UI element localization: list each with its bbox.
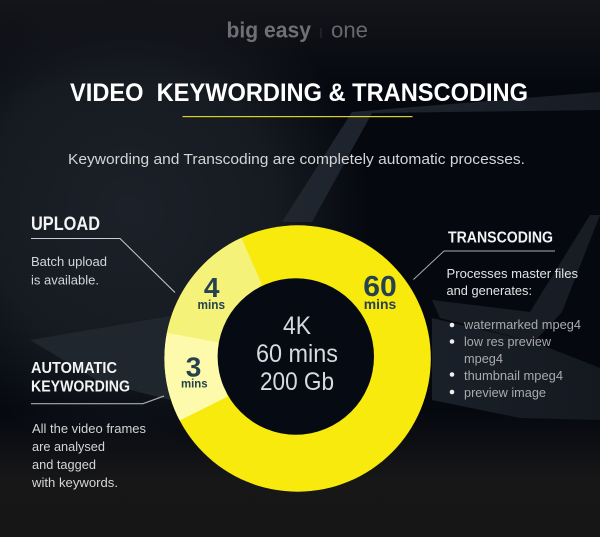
segment: automatic keywording 3 mins (164, 332, 228, 420)
panel: transcoding (414, 230, 581, 400)
upload description: Batch upload (31, 254, 107, 269)
donut chart (164, 225, 431, 492)
leader line: upload (31, 238, 175, 292)
value: 60 mins: mins (364, 296, 396, 312)
value: 4 mins: mins (198, 298, 225, 312)
keywording description (31, 421, 146, 490)
segment: transcoding 60 mins (164, 225, 431, 492)
segment: upload 4 mins (166, 238, 262, 342)
title underline (182, 116, 412, 117)
heading: automatic keywording: KEYWORDING (31, 378, 130, 396)
centre text: 4K (283, 312, 311, 340)
brand logo: big easy (226, 18, 312, 42)
heading: transcoding: TRANSCODING (448, 230, 553, 247)
output list: preview image (464, 385, 546, 400)
output list: low res preview (464, 334, 552, 349)
output list: mpeg4 (464, 351, 503, 366)
output list: thumbnail mpeg4 (464, 368, 563, 383)
brand logo: one (331, 18, 368, 42)
heading: upload: UPLOAD (31, 214, 100, 235)
transcoding description: Processes master files (446, 266, 578, 281)
value: 4 mins: 4 (204, 272, 220, 303)
panel: upload (31, 214, 175, 292)
keywording description: are analysed (32, 439, 105, 454)
centre text (256, 312, 338, 396)
transcoding description: and generates: (446, 283, 532, 298)
keywording description: and tagged (32, 457, 96, 472)
upload description: is available. (31, 272, 99, 288)
value: 3 mins (181, 352, 208, 391)
upload description (31, 254, 107, 288)
title: VIDEO KEYWORDING & TRANSCODING (70, 79, 528, 107)
brand logo (226, 18, 368, 42)
output list: watermarked mpeg4 (463, 317, 581, 332)
output list (450, 317, 581, 400)
centre text: 200 Gb (260, 368, 334, 396)
heading: automatic keywording: AUTOMATIC (31, 360, 117, 377)
centre text: 60 mins (256, 340, 338, 368)
donut centre (218, 278, 374, 435)
leader line: keywording (31, 396, 164, 404)
value: 4 mins (198, 272, 225, 312)
transcoding description (446, 266, 578, 298)
leader line: transcoding (414, 251, 555, 280)
intro sentence: Keywording and Transcoding are completely automatic processes. (68, 151, 525, 168)
keywording description: All the video frames (32, 421, 146, 436)
value: 3 mins: mins (181, 377, 208, 391)
heading: automatic keywording (31, 360, 130, 396)
value: 60 mins: 60 (363, 271, 397, 303)
keywording description: with keywords. (31, 475, 118, 490)
value: 3 mins: 3 (186, 352, 201, 383)
panel: automatic keywording (31, 360, 164, 490)
